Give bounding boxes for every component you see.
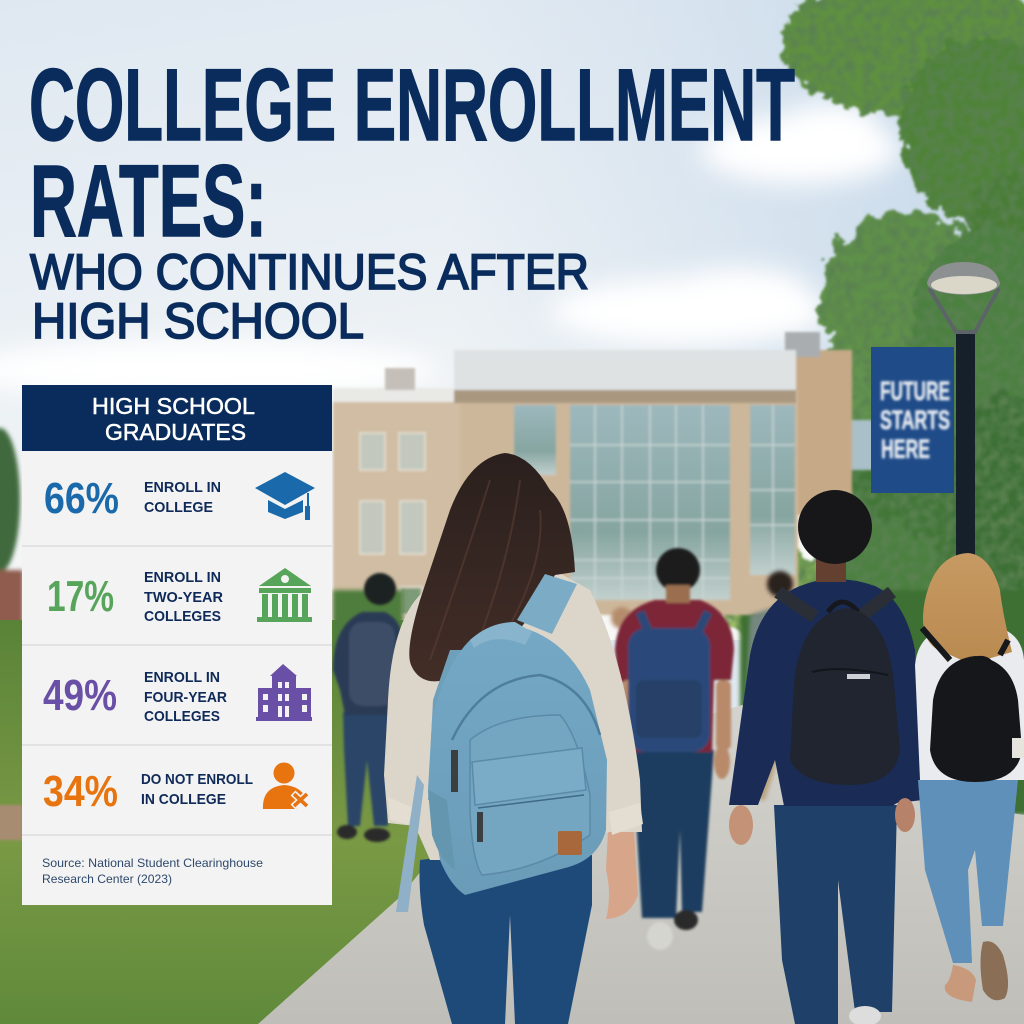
row: 66% enroll in college: 66% [44,474,119,523]
panel heading: GRADUATES [105,419,246,445]
row: 49% four-year colleges [43,664,312,725]
row: 34% do not enroll: DO NOT ENROLL [141,771,253,788]
row: 34% do not enroll: IN COLLEGE [141,791,226,808]
source note: Source: National Student Clearinghouse [42,856,263,870]
student: navy sweater with black backpack [729,490,923,1024]
tan wing windows [360,433,425,615]
building [333,332,874,620]
row: 17% two-year colleges [47,568,312,625]
banner: HERE [881,434,930,464]
panel heading [22,385,332,451]
left edge trees and hedge [0,428,23,810]
row: 66% enroll in college: ENROLL IN [144,479,221,496]
row: 17% two-year colleges: ENROLL IN [144,569,221,586]
title: HIGH SCHOOL [32,293,364,349]
lamp post [927,262,1000,562]
row: 66% enroll in college: COLLEGE [144,499,213,516]
title: WHO CONTINUES AFTER [30,244,589,300]
row: 66% enroll in college [44,472,315,523]
panel: high school graduates [22,385,332,905]
background student: far left [333,573,402,842]
icon: columned college building [257,568,312,622]
source note [42,856,263,886]
grass lawn [0,590,480,1024]
jeans [420,850,592,1024]
backpack straps [517,574,577,634]
trees: upper right and right side foliage [723,0,1024,632]
hair [409,453,575,681]
row: 17% two-year colleges: 17% [47,572,114,621]
backpack body [428,626,607,895]
shrubs behind walkers on the right [740,590,1024,815]
title [29,48,795,349]
background student: distant figures [611,571,795,800]
icon: graduation cap [255,472,315,520]
hand right [606,830,638,919]
source note: Research Center (2023) [42,872,172,886]
student: blonde with black backpack [915,553,1024,1002]
row: 17% two-year colleges: TWO-YEAR [144,589,223,606]
banner: STARTS [880,405,950,435]
row: 34% do not enroll [43,762,308,816]
shirt [384,565,642,860]
row: 17% two-year colleges: COLLEGES [144,608,221,625]
row: 49% four-year colleges: FOUR-YEAR [144,689,227,706]
row: 49% four-year colleges: 49% [43,671,117,720]
banner: FUTURE [880,376,950,406]
panel heading: HIGH SCHOOL [92,393,255,419]
main student: long hair, blue backpack [384,453,643,1024]
icon: person with x [263,762,308,809]
glass curtain walls [514,405,795,600]
student: maroon shirt with blue backpack [615,548,734,950]
title: RATES: [30,144,267,258]
background: sky [0,0,1024,640]
row: 49% four-year colleges: ENROLL IN [144,669,220,686]
banner [871,347,954,493]
row: 34% do not enroll: 34% [43,767,118,816]
sidewalk [258,700,1024,1024]
cuffs [388,797,643,835]
row: 49% four-year colleges: COLLEGES [144,708,220,725]
clouds [0,103,900,400]
icon: multi-storey campus building [256,664,312,721]
